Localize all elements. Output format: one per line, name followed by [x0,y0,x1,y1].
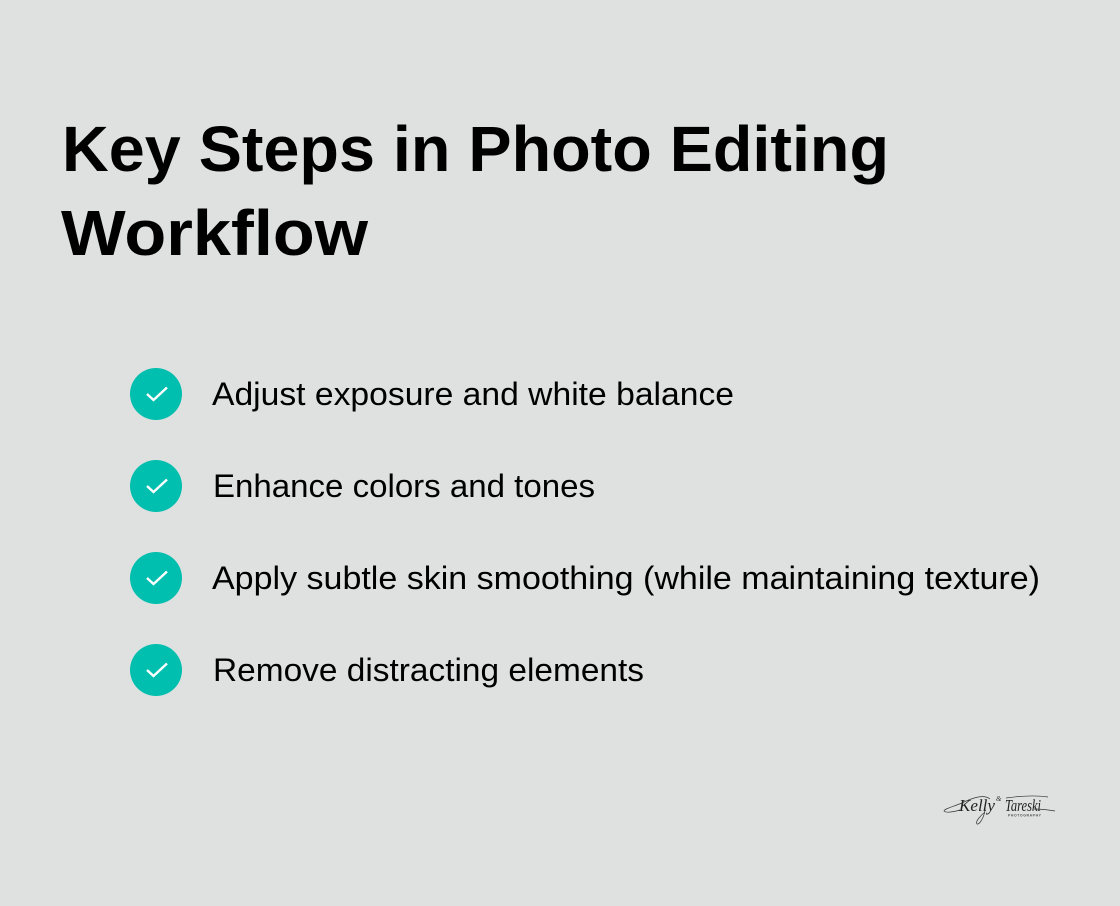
title: Workflow [61,197,368,269]
list item: adjust exposure [130,368,734,420]
checklist [130,368,1040,696]
icon: check circle [130,460,182,512]
title [61,113,889,269]
signature logo: Kelly [958,796,995,815]
item text: Enhance colors and tones [213,468,595,504]
list item: remove distractions [130,644,644,696]
list item: enhance colors [130,460,595,512]
list item: skin smoothing [130,552,1040,604]
signature logo [944,795,1055,824]
item text: Apply subtle skin smoothing (while maintaining texture) [212,560,1040,596]
icon: check circle [130,644,182,696]
title: Key Steps in Photo Editing [62,113,889,185]
item text: Remove distracting elements [213,652,644,688]
signature logo: & [996,795,1002,803]
signature logo: Tareski [1005,796,1041,815]
signature logo: PHOTOGRAPHY [1008,814,1042,818]
icon: check circle [130,552,182,604]
icon: check circle [130,368,182,420]
item text: Adjust exposure and white balance [212,376,734,412]
